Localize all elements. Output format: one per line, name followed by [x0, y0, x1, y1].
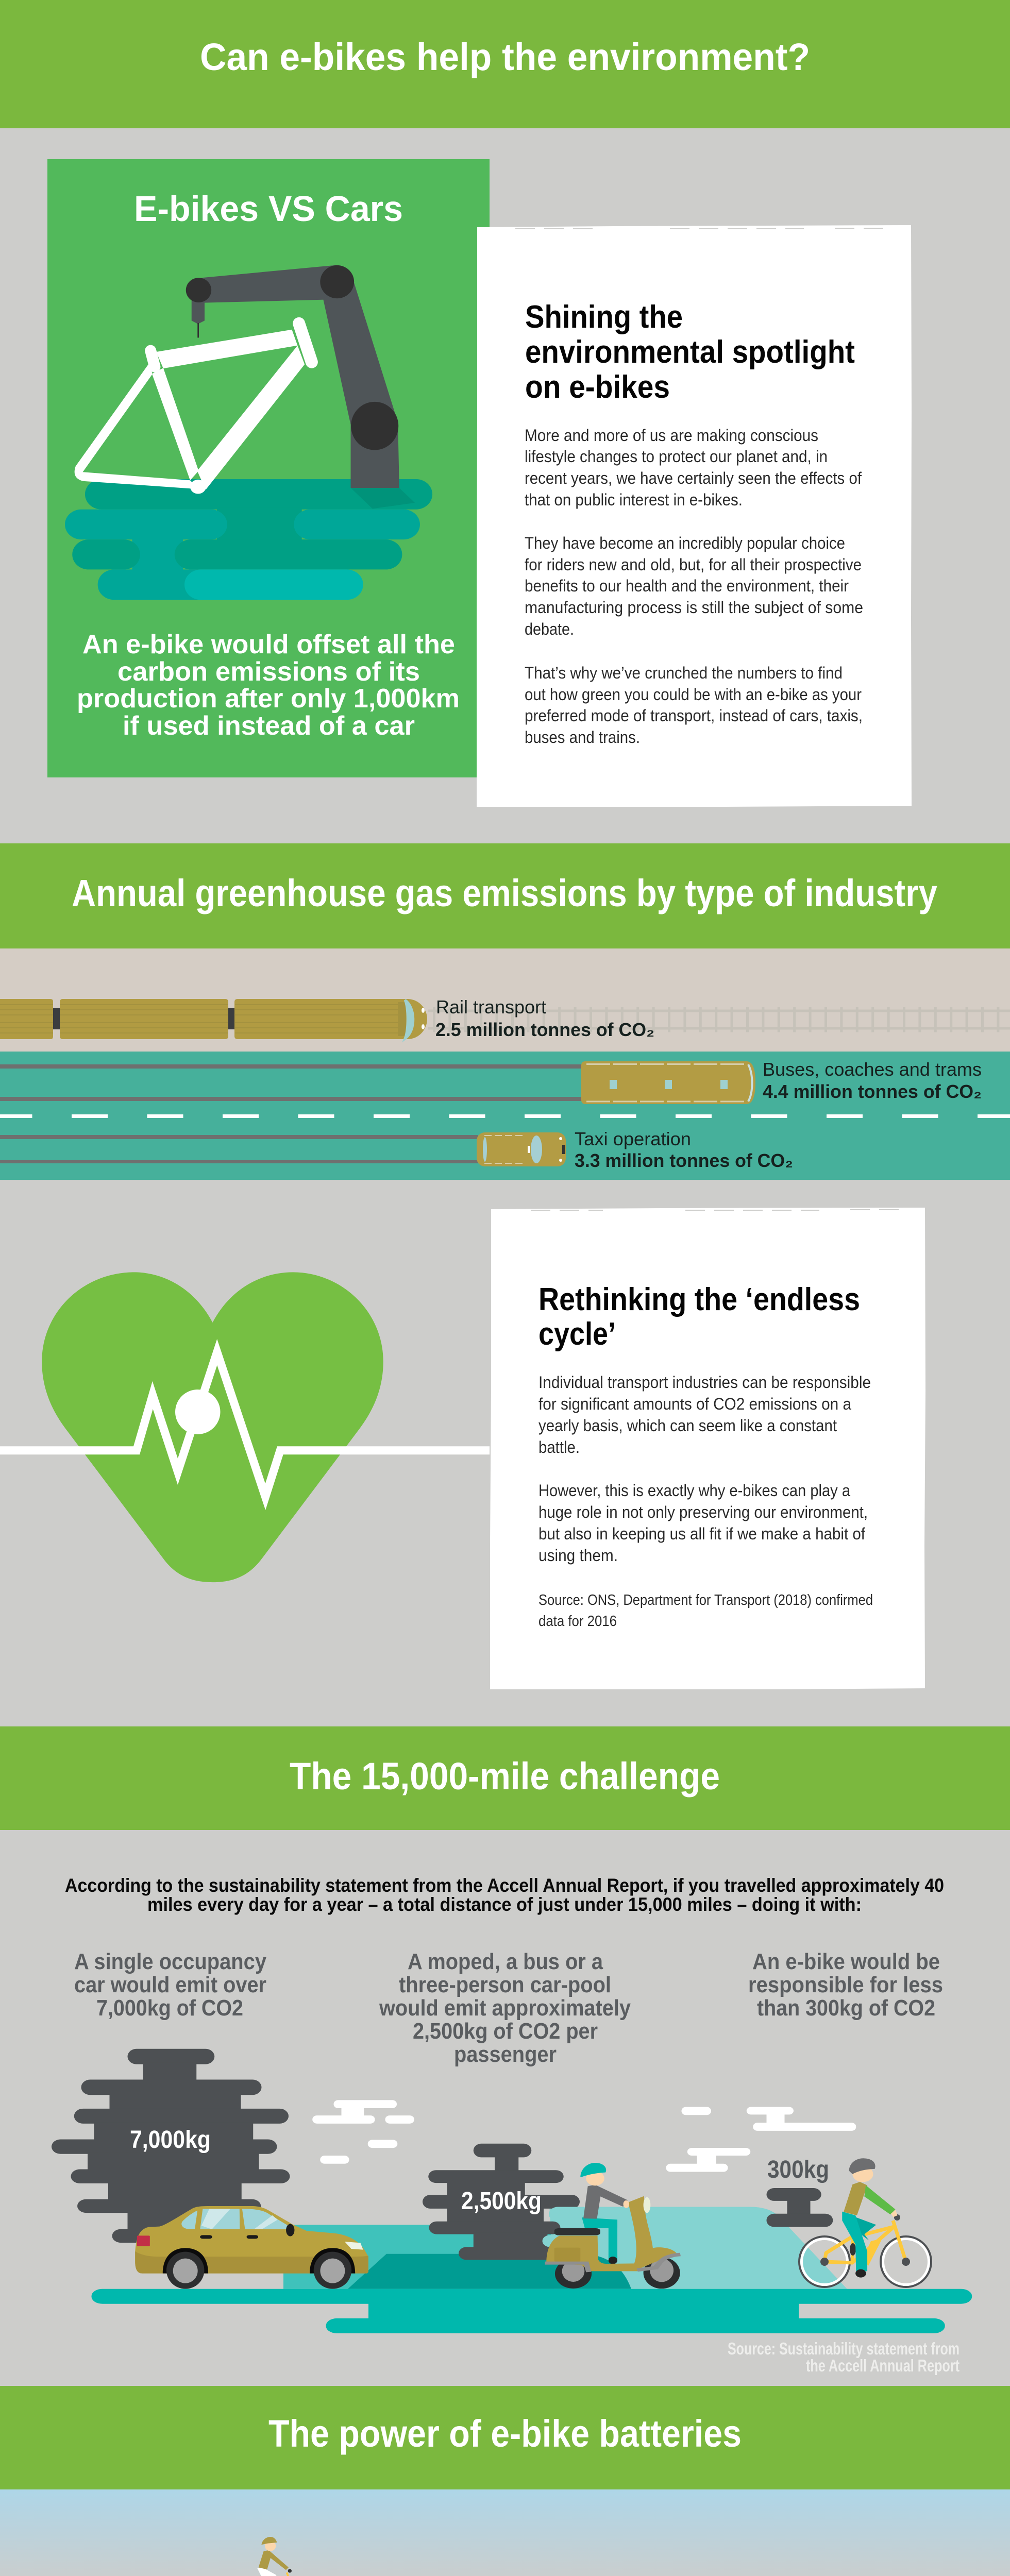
sky backdrop	[0, 2489, 1010, 2576]
column: car: 7,000kg of CO2	[96, 1995, 243, 2021]
label: 7,000kg: 7,000kg	[130, 2126, 211, 2154]
card body text: benefits to our health and the environment, their	[525, 577, 849, 595]
column: moped, bus or car-pool: A moped, a bus or a	[408, 1949, 603, 1974]
card body text: preferred mode of transport, instead of cars, taxis,	[525, 706, 863, 725]
card body text: manufacturing process is still the subject of some	[525, 598, 863, 617]
heading: can e-bikes help	[0, 0, 1010, 128]
card body text: using them.	[538, 1546, 618, 1565]
label: taxi: 3.3 million tonnes of CO₂	[575, 1150, 793, 1171]
label: 2,500kg: 2,500kg	[461, 2188, 542, 2215]
card source note: Source: ONS, Department for Transport (2018) confirmed	[538, 1592, 873, 1608]
label: rail transport: Rail transport	[436, 996, 546, 1018]
column: car: A single occupancy	[74, 1949, 266, 1974]
card body text: out how green you could be with an e-bike as your	[525, 685, 862, 704]
heading: 15,000-mile challenge: The 15,000-mile challenge	[290, 1755, 720, 1798]
column: car	[74, 1949, 266, 2021]
column: e-bike	[748, 1949, 943, 2021]
road and hills	[92, 2207, 972, 2333]
card body text: for riders new and old, but, for all their prospective	[525, 555, 862, 574]
column: moped, bus or car-pool: 2,500kg of CO2 per	[413, 2019, 598, 2044]
panel caption: offset statistic: if used instead of a car	[123, 711, 415, 741]
heading: can e-bikes help: Can e-bikes help the environment?	[200, 36, 810, 78]
card body text: They have become an incredibly popular choice	[525, 534, 845, 552]
card heading: Rethinking the ‘endless	[538, 1282, 860, 1317]
text card: rethinking the endless cycle	[490, 1208, 925, 1689]
rail strip	[0, 948, 1010, 1052]
card body text: More and more of us are making conscious	[525, 426, 818, 445]
section: 15,000-mile challenge	[0, 1726, 1010, 2375]
panel caption: offset statistic	[77, 630, 460, 741]
card body text: lifestyle changes to protect our planet and, in	[525, 447, 828, 466]
panel caption: offset statistic: carbon emissions of its	[117, 657, 420, 687]
label: taxi	[575, 1128, 793, 1171]
smoke cloud: 2,500kg	[423, 2144, 580, 2260]
card body text: Individual transport industries can be responsible	[538, 1373, 871, 1392]
label: rail transport	[435, 996, 654, 1040]
card body text: for significant amounts of CO2 emissions on a	[538, 1395, 851, 1413]
label: rail transport: 2.5 million tonnes of CO₂	[435, 1019, 654, 1040]
column: moped, bus or car-pool: passenger	[454, 2042, 557, 2067]
icon: car	[135, 2206, 368, 2289]
label: 300kg: 300kg	[767, 2156, 829, 2183]
section: e-bike batteries	[0, 2386, 1010, 2576]
column: moped, bus or car-pool: three-person car-pool	[399, 1972, 611, 1997]
card source note: data for 2016	[538, 1613, 617, 1630]
card body text: battle.	[538, 1438, 580, 1456]
smoke cloud: 7,000kg	[52, 2049, 290, 2243]
card body text: However, this is exactly why e-bikes can play a	[538, 1481, 850, 1500]
column: moped, bus or car-pool: would emit approximately	[379, 1995, 631, 2021]
heading: 15,000-mile challenge	[0, 1726, 1010, 1830]
icon: e-bike with rider	[799, 2158, 931, 2287]
illustration: robot arm building bike frame	[65, 265, 432, 600]
clouds	[312, 2100, 856, 2172]
card body text: recent years, we have certainly seen the effects of	[525, 469, 862, 487]
card body text	[525, 426, 863, 747]
card heading: cycle’	[538, 1316, 616, 1352]
text card: shining the spotlight	[477, 225, 912, 807]
label: buses	[763, 1059, 982, 1102]
label: buses: Buses, coaches and trams	[763, 1059, 982, 1080]
illustration: emissions scene	[52, 2049, 972, 2333]
light teal bumps	[542, 2207, 605, 2252]
smoke cloud: 300kg	[767, 2188, 833, 2227]
icon: heart with pulse line	[0, 1272, 490, 1582]
icon: moped with rider	[545, 2163, 680, 2289]
column: e-bike: responsible for less	[748, 1972, 943, 1997]
intro statement	[65, 1875, 944, 1915]
card body text: yearly basis, which can seem like a constant	[538, 1416, 837, 1435]
icon: bus	[581, 1061, 755, 1104]
card heading	[538, 1282, 860, 1352]
icon: taxi	[477, 1132, 566, 1166]
panel heading: E-bikes VS Cars	[134, 189, 403, 229]
road strip	[0, 1052, 1010, 1180]
label: taxi: Taxi operation	[575, 1128, 691, 1149]
source note: the Accell Annual Report	[806, 2356, 959, 2375]
card body text: but also in keeping us all fit if we make a habit of	[538, 1524, 865, 1543]
section: intro	[0, 0, 1010, 807]
card source note	[538, 1592, 873, 1630]
heading: power of batteries	[0, 2386, 1010, 2489]
intro statement: According to the sustainability statement from the Accell Annual Report, if you travelled approximately 40	[65, 1875, 944, 1896]
card body text: huge role in not only preserving our environment,	[538, 1503, 868, 1521]
card body text: That’s why we’ve crunched the numbers to find	[525, 664, 843, 682]
card heading	[525, 299, 855, 405]
heading: power of batteries: The power of e-bike batteries	[268, 2412, 742, 2455]
card body text	[538, 1373, 871, 1565]
icon: train	[0, 999, 427, 1039]
panel: e-bikes vs cars	[47, 159, 490, 777]
column: moped, bus or car-pool	[379, 1949, 631, 2067]
panel caption: offset statistic: An e-bike would offset all the	[82, 630, 455, 659]
card body text: debate.	[525, 620, 574, 638]
card body text: buses and trains.	[525, 728, 640, 747]
source note	[728, 2339, 959, 2375]
column: e-bike: than 300kg of CO2	[757, 1995, 935, 2021]
label: buses: 4.4 million tonnes of CO₂	[763, 1081, 982, 1102]
card heading: on e-bikes	[525, 369, 670, 405]
card heading: Shining the	[525, 299, 683, 335]
intro statement: miles every day for a year – a total distance of just under 15,000 miles – doing it with:	[147, 1894, 862, 1915]
column: car: car would emit over	[74, 1972, 266, 1997]
card heading: environmental spotlight	[525, 334, 855, 370]
section: greenhouse gas emissions	[0, 843, 1010, 1689]
card body text: that on public interest in e-bikes.	[525, 490, 743, 509]
icon: cyclist with arrow	[232, 2537, 352, 2576]
panel caption: offset statistic: production after only 1,000km	[77, 684, 460, 714]
column: e-bike: An e-bike would be	[752, 1949, 940, 1974]
heading: annual emissions	[0, 843, 1010, 948]
